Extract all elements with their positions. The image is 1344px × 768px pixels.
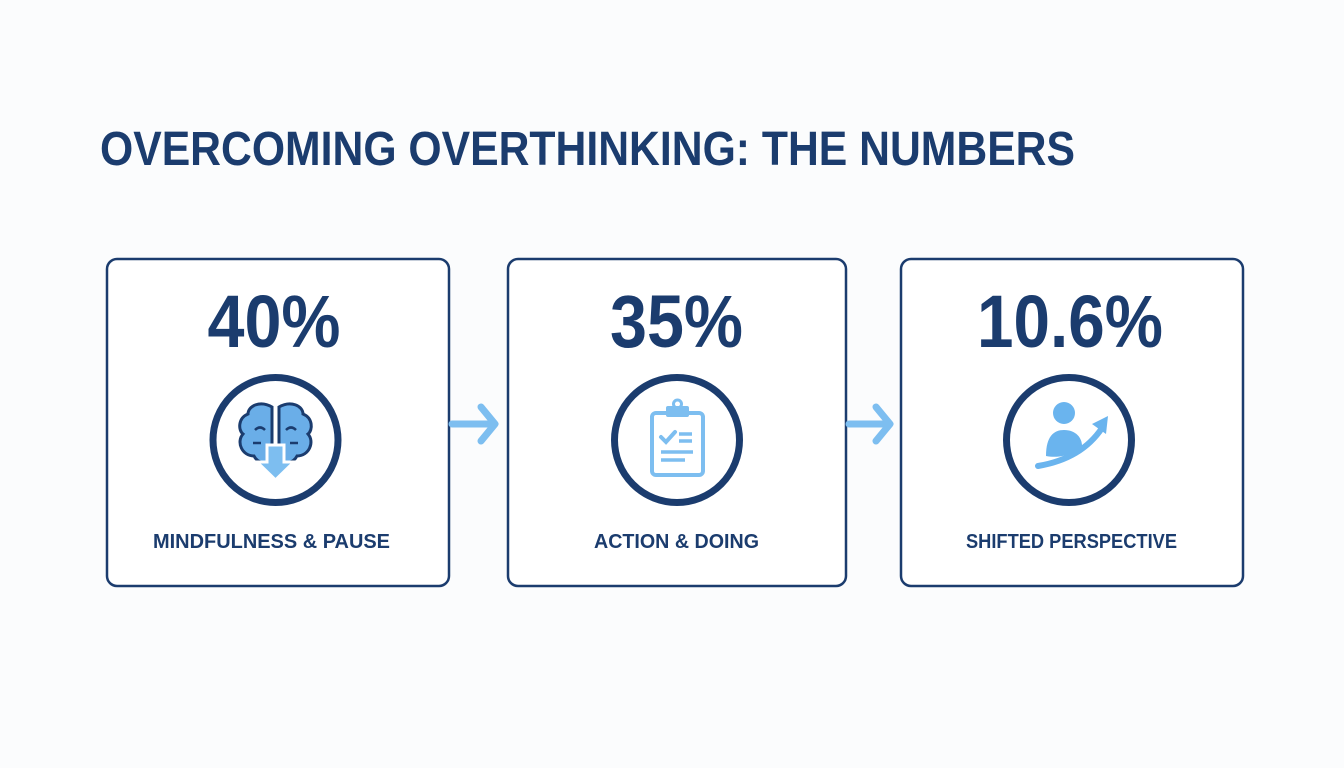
label: ACTION & DOING — [594, 531, 759, 553]
title: OVERCOMING OVERTHINKING: THE NUMBERS — [100, 123, 1075, 176]
panel: mindfulness — [107, 259, 449, 586]
icon: person with rising arrow — [1006, 378, 1132, 502]
label: MINDFULNESS & PAUSE — [153, 531, 390, 553]
stat: 40%: 40% — [208, 280, 340, 363]
arrow 1 — [452, 407, 495, 441]
label: SHIFTED PERSPECTIVE — [966, 531, 1177, 553]
panel: perspective — [901, 259, 1243, 586]
stat: 35%: 35% — [610, 280, 743, 363]
panel: action — [508, 259, 846, 586]
icon: brain with down arrow — [213, 378, 338, 502]
icon: clipboard — [614, 378, 740, 502]
stat: 10.6%: 10.6% — [977, 280, 1163, 363]
arrow 2 — [849, 407, 890, 441]
